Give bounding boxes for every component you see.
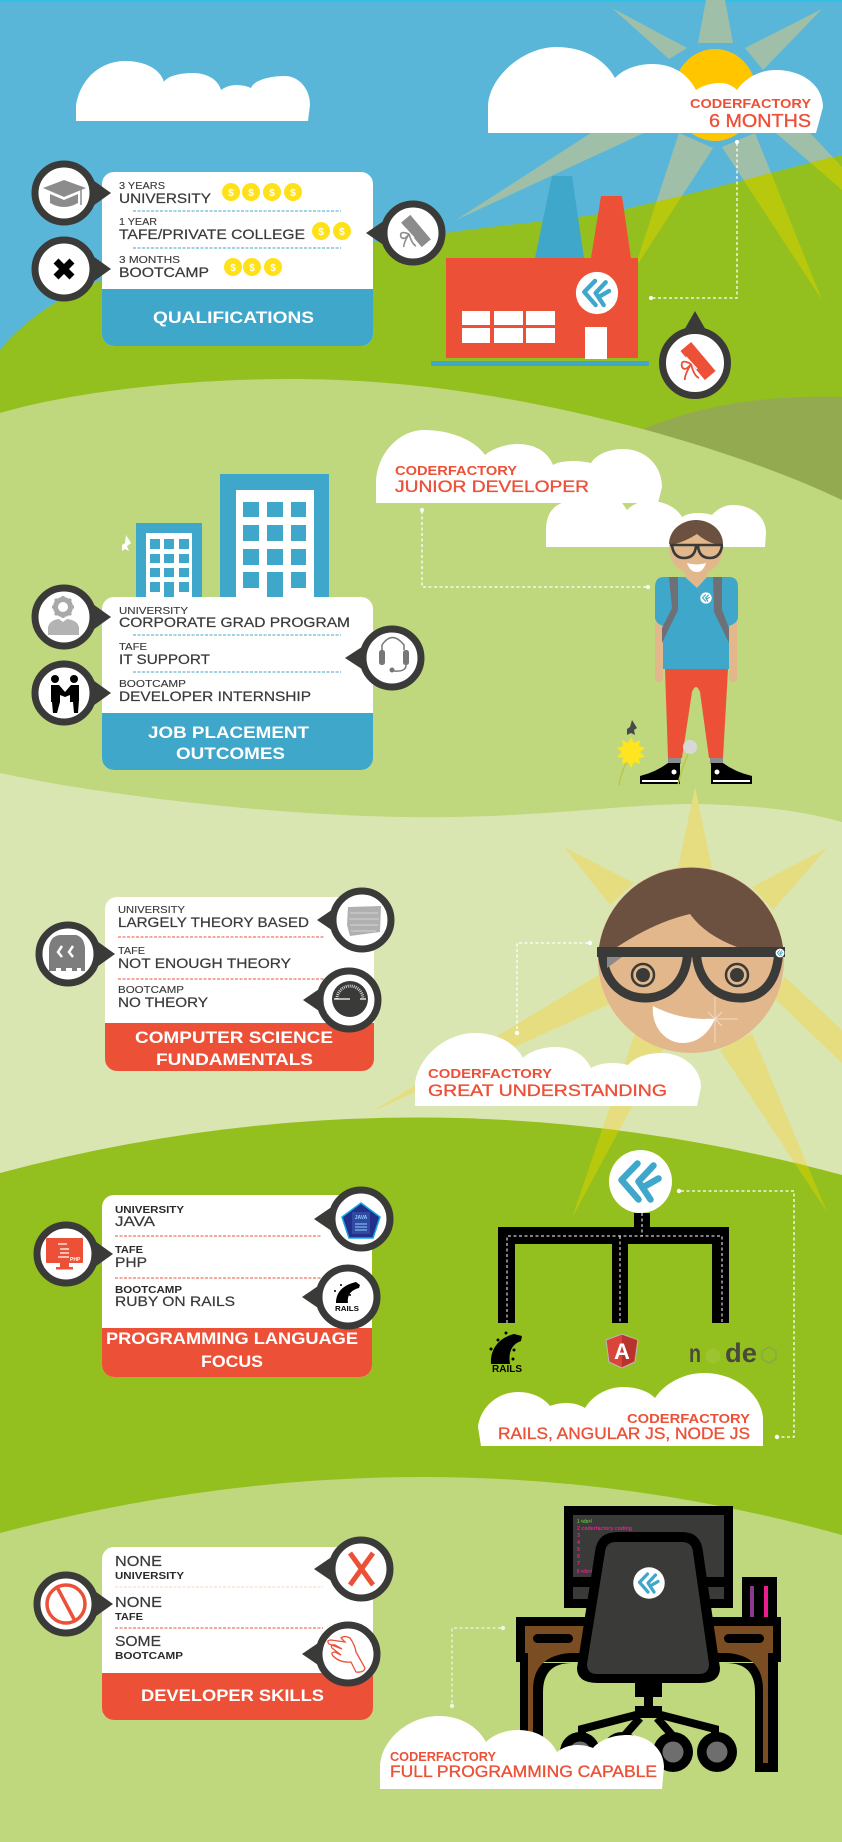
code lines: 8 <do>/ xyxy=(577,1569,592,1575)
hill: pale green xyxy=(0,773,842,1200)
sun rays over sky xyxy=(456,0,842,300)
panel: programming language focus xyxy=(102,1195,372,1377)
panel: programming language focus: FOCUS xyxy=(201,1352,263,1371)
callout cloud: partner cloud behind junior developer xyxy=(546,500,766,547)
neck xyxy=(685,570,707,588)
panel: developer skills: NONE xyxy=(115,1594,162,1611)
panel: job placement outcomes: OUTCOMES xyxy=(176,744,285,763)
callout cloud: rails angular node: RAILS, ANGULAR JS, NODE JS xyxy=(498,1424,750,1443)
panel: qualifications: QUALIFICATIONS xyxy=(153,308,314,327)
callout cloud: great understanding: GREAT UNDERSTANDING xyxy=(428,1081,667,1100)
shoes xyxy=(640,763,680,784)
decorative cloud top left xyxy=(76,61,310,121)
icon: php monitor: PHP xyxy=(70,1257,81,1263)
icon: handshake xyxy=(35,664,111,722)
connector: logo to cloud xyxy=(677,1189,794,1439)
panel: computer science fundamentals: NO THEORY xyxy=(118,994,209,1010)
icon: php monitor xyxy=(37,1225,113,1283)
junior developer figure xyxy=(640,520,752,784)
code lines xyxy=(577,1519,632,1575)
panel: programming language focus: RUBY ON RAILS xyxy=(115,1293,235,1309)
panel: job placement outcomes: UNIVERSITY xyxy=(119,606,188,617)
icon: hand xyxy=(302,1625,377,1683)
panel: job placement outcomes: TAFE xyxy=(119,642,147,653)
icon: node logo xyxy=(689,1338,776,1368)
code lines: 6 xyxy=(577,1554,580,1560)
panel: job placement outcomes: JOB PLACEMENT xyxy=(148,723,310,742)
bootcamp coins: $ xyxy=(270,263,276,274)
panel: computer science fundamentals: TAFE xyxy=(118,946,145,957)
panel: developer skills: UNIVERSITY xyxy=(115,1571,184,1582)
icon: java: JAVA xyxy=(355,1215,368,1221)
panel: developer skills: DEVELOPER SKILLS xyxy=(141,1686,324,1705)
hill: olive xyxy=(600,397,842,560)
university coins xyxy=(222,183,302,201)
panel: computer science fundamentals: COMPUTER SCIENCE xyxy=(135,1028,333,1047)
icon: rails bubble: RAILS xyxy=(335,1306,359,1313)
connector: cloud to developer xyxy=(420,508,650,589)
panel: job placement outcomes: BOOTCAMP xyxy=(119,679,186,690)
code lines: 3 xyxy=(577,1533,580,1539)
panel: qualifications xyxy=(102,172,373,346)
panel: job placement outcomes xyxy=(102,597,373,770)
panel: programming language focus: TAFE xyxy=(115,1245,143,1256)
code lines: 5 xyxy=(577,1547,580,1553)
connector: face to cloud xyxy=(515,941,592,1035)
factory xyxy=(431,176,649,366)
callout cloud: 6 months: CODERFACTORY xyxy=(690,96,811,111)
hill: top green xyxy=(0,155,842,600)
icon: rails logo: RAILS xyxy=(492,1364,522,1375)
panel: computer science fundamentals: NOT ENOUGH THEORY xyxy=(118,955,292,971)
icon: rails bubble xyxy=(302,1268,377,1326)
icon: rails logo xyxy=(490,1332,522,1375)
callout cloud: junior developer xyxy=(376,430,662,503)
callout cloud: 6 months: 6 MONTHS xyxy=(709,111,811,131)
icon: grey diploma xyxy=(366,204,442,262)
logo with roads xyxy=(498,1150,729,1323)
panel: developer skills: TAFE xyxy=(115,1612,143,1623)
icon: books xyxy=(317,891,391,949)
icon: white butterfly xyxy=(122,535,131,551)
panel: programming language focus: PHP xyxy=(115,1254,147,1270)
panel: programming language focus: UNIVERSITY xyxy=(115,1205,184,1216)
icon: angular logo: A xyxy=(614,1339,630,1364)
icon: ghost xyxy=(39,925,115,983)
callout cloud: full programming capable: FULL PROGRAMMING CAPABLE xyxy=(390,1762,657,1781)
straps xyxy=(662,577,729,643)
tafe coins: $ xyxy=(339,227,345,238)
tafe coins xyxy=(312,222,351,240)
connector: cloud to factory xyxy=(649,140,739,300)
university coins: $ xyxy=(269,188,275,199)
callout cloud: full programming capable: CODERFACTORY xyxy=(390,1749,496,1764)
callout cloud: junior developer: JUNIOR DEVELOPER xyxy=(395,477,589,496)
arms xyxy=(655,620,663,682)
hill: light green xyxy=(0,379,842,900)
tafe coins: $ xyxy=(318,227,324,238)
icon: java xyxy=(314,1190,390,1248)
sun rays over hill xyxy=(638,157,842,300)
icon: node logo: n xyxy=(689,1338,701,1368)
bootcamp coins: $ xyxy=(249,263,255,274)
icon: red X xyxy=(314,1540,390,1598)
panel: computer science fundamentals: LARGELY THEORY BASED xyxy=(118,914,309,930)
icon: black cross xyxy=(35,240,111,298)
icon: graduation cap xyxy=(35,164,111,222)
callout cloud: great understanding xyxy=(415,1033,701,1106)
panel: computer science fundamentals: BOOTCAMP xyxy=(118,985,184,996)
big sun rays on pale xyxy=(371,787,842,1218)
hill: mid green xyxy=(0,1117,842,1600)
panel: developer skills: BOOTCAMP xyxy=(115,1651,183,1662)
panel: developer skills: SOME xyxy=(115,1633,161,1650)
sun xyxy=(673,49,757,141)
code lines: 1 <do>/ xyxy=(577,1519,592,1525)
shirt xyxy=(655,577,738,669)
icon: headset xyxy=(345,629,421,687)
icon: gear person xyxy=(35,588,111,646)
panel: computer science fundamentals: FUNDAMENTALS xyxy=(156,1050,313,1069)
callout cloud: full programming capable xyxy=(380,1716,664,1789)
monitor xyxy=(564,1506,733,1608)
panel: programming language focus: JAVA xyxy=(115,1213,156,1229)
icon: no sign xyxy=(37,1575,113,1633)
panel: computer science fundamentals xyxy=(105,897,374,1071)
callout cloud: 6 months xyxy=(488,47,823,133)
panel: developer skills: NONE xyxy=(115,1553,162,1570)
icon: angular logo xyxy=(606,1334,638,1368)
panel: programming language focus: PROGRAMMING LANGUAGE xyxy=(106,1329,358,1348)
panel: developer skills xyxy=(102,1547,373,1720)
panel: programming language focus: BOOTCAMP xyxy=(115,1285,182,1296)
hill: bottom light green xyxy=(0,1477,842,1842)
code lines: 4 xyxy=(577,1540,581,1546)
panel: qualifications: 1 YEAR xyxy=(119,217,157,228)
chair base xyxy=(635,1683,662,1697)
books xyxy=(742,1577,777,1618)
desk xyxy=(516,1617,781,1662)
callout cloud: rails angular node xyxy=(478,1373,763,1446)
panel: job placement outcomes: CORPORATE GRAD PROGRAM xyxy=(119,614,350,630)
big sun rays over mid green xyxy=(572,1128,827,1218)
callout cloud: rails angular node: CODERFACTORY xyxy=(627,1411,750,1426)
trousers xyxy=(665,669,728,758)
callout cloud: junior developer: CODERFACTORY xyxy=(395,463,517,478)
bootcamp coins xyxy=(224,258,282,276)
buildings xyxy=(136,474,329,603)
connector: desk to cloud xyxy=(450,1626,505,1708)
desk, monitor and chair xyxy=(516,1506,781,1772)
face with sun rays xyxy=(597,867,785,1053)
callout cloud: great understanding: CODERFACTORY xyxy=(428,1066,552,1081)
panel: qualifications: 3 YEARS xyxy=(119,181,165,192)
university coins: $ xyxy=(248,188,254,199)
panel: job placement outcomes: DEVELOPER INTERNSHIP xyxy=(119,688,311,704)
panel: qualifications: BOOTCAMP xyxy=(119,264,209,280)
wheels xyxy=(560,1732,600,1772)
chair back xyxy=(577,1532,720,1683)
bootcamp coins: $ xyxy=(230,263,236,274)
icon: gauge xyxy=(303,971,378,1029)
university coins: $ xyxy=(228,188,234,199)
flowers and butterfly xyxy=(617,720,697,785)
head xyxy=(669,521,723,575)
panel: qualifications: TAFE/PRIVATE COLLEGE xyxy=(119,226,305,242)
university coins: $ xyxy=(290,188,296,199)
icon: red diploma xyxy=(662,311,728,396)
code lines: 2 coderfactory coding xyxy=(577,1526,632,1532)
icon: node logo: de xyxy=(725,1338,757,1368)
code lines: 7 xyxy=(577,1561,580,1567)
panel: job placement outcomes: IT SUPPORT xyxy=(119,651,210,667)
panel: qualifications: UNIVERSITY xyxy=(119,190,212,206)
panel: qualifications: 3 MONTHS xyxy=(119,255,180,266)
panel: computer science fundamentals: UNIVERSITY xyxy=(118,905,185,916)
